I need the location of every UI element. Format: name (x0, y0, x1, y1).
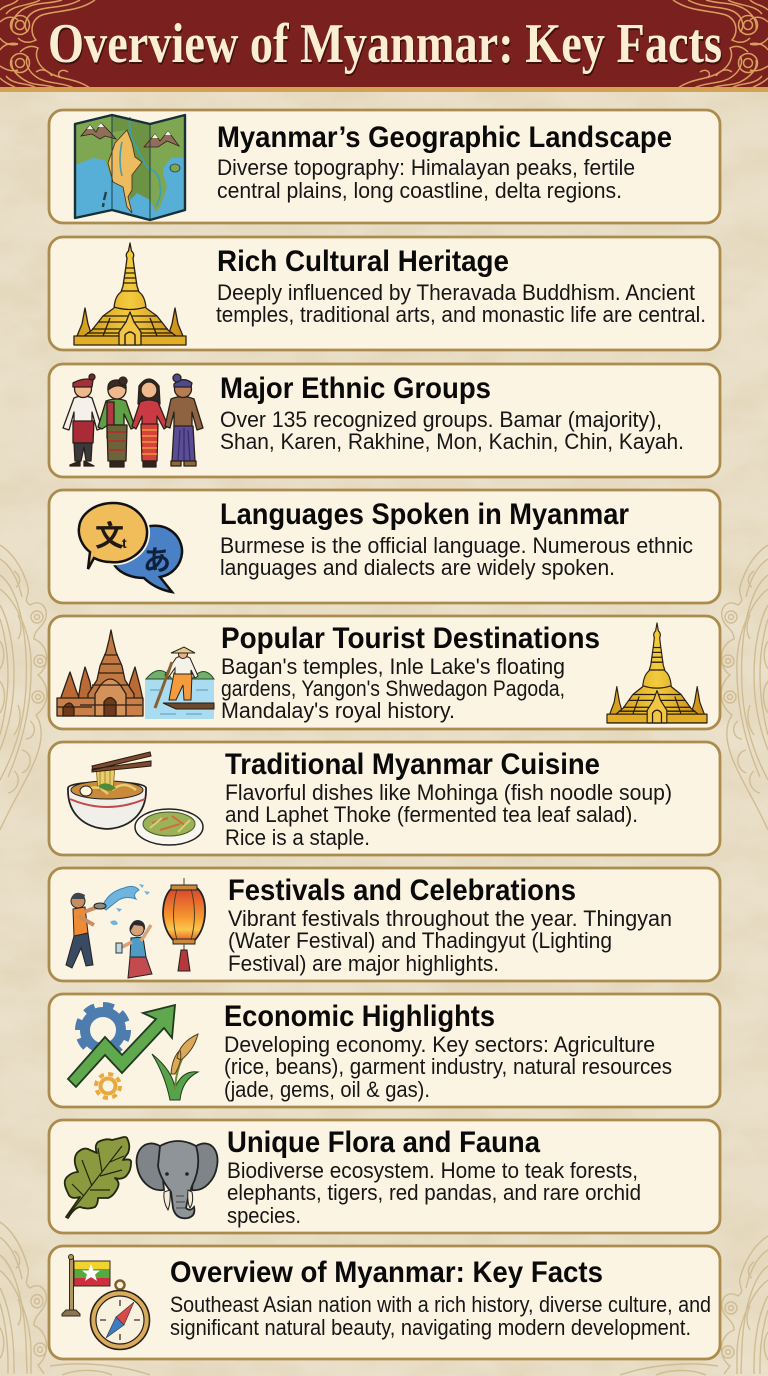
text block: Festival) are major highlights. (228, 951, 499, 976)
header banner (0, 0, 768, 92)
text block (228, 906, 672, 976)
text block: Flavorful dishes like Mohinga (fish noodle soup) (225, 780, 672, 805)
text block (221, 654, 565, 723)
heading: Languages Spoken in Myanmar (220, 498, 629, 531)
text block: Developing economy. Key sectors: Agriculture (224, 1032, 655, 1057)
text block: significant natural beauty, navigating modern development. (170, 1315, 691, 1340)
text block: species. (227, 1203, 301, 1228)
panel: ethnic groups (49, 364, 720, 477)
text block (170, 1292, 711, 1340)
heading: Overview of Myanmar: Key Facts (170, 1256, 603, 1289)
text block (220, 533, 693, 580)
text block: Diverse topography: Himalayan peaks, fertile (217, 155, 635, 180)
icon: golden pagoda (607, 623, 707, 723)
icon: paper lantern (163, 878, 205, 971)
icon: golden pagoda (74, 243, 186, 345)
heading: Traditional Myanmar Cuisine (225, 748, 600, 781)
panel: tourist destinations (49, 616, 720, 729)
background ornament: right side (620, 545, 768, 1375)
icon: compass (90, 1280, 150, 1350)
icon: Inle Lake boatman (145, 647, 214, 719)
text block: Bagan's temples, Inle Lake's floating (221, 654, 565, 679)
text block: Rice is a staple. (225, 825, 370, 850)
icon: speech bubbles: t (122, 535, 127, 551)
text block: and Laphet Thoke (fermented tea leaf salad). (225, 802, 638, 827)
text block (225, 780, 672, 850)
panel: festivals (49, 868, 720, 981)
panel: cuisine (49, 742, 720, 855)
icon: Bagan temple (57, 630, 143, 716)
text block: Burmese is the official language. Numerous ethnic (220, 533, 693, 558)
icon: Myanmar flag (62, 1254, 110, 1316)
text block: gardens, Yangon's Shwedagon Pagoda, (221, 676, 565, 701)
text block (220, 407, 684, 454)
panel: languages (49, 490, 720, 603)
icon: folded map (75, 115, 185, 220)
text block: Over 135 recognized groups. Bamar (majority), (220, 407, 662, 432)
text block: (Water Festival) and Thadingyut (Lighting (228, 928, 612, 953)
heading: Popular Tourist Destinations (221, 622, 600, 655)
text block (217, 155, 635, 203)
heading: Unique Flora and Fauna (227, 1126, 541, 1159)
header corner ornaments (0, 0, 768, 88)
icon: elephant head (137, 1141, 218, 1218)
heading: Rich Cultural Heritage (217, 245, 509, 278)
text block: (jade, gems, oil & gas). (224, 1077, 430, 1102)
icon: four people in traditional dress (63, 374, 203, 467)
text block: languages and dialects are widely spoken. (220, 555, 615, 580)
text block: central plains, long coastline, delta regions. (217, 178, 622, 203)
panel: geographic landscape (49, 110, 720, 223)
text block: Deeply influenced by Theravada Buddhism. Ancient (217, 280, 696, 305)
icon: gears, growth arrow and rice (68, 1005, 198, 1100)
heading: Myanmar’s Geographic Landscape (217, 121, 672, 154)
panel: flora and fauna (49, 1120, 720, 1233)
panel: economy (49, 994, 720, 1107)
text block: temples, traditional arts, and monastic life are central. (216, 302, 706, 327)
text block: (rice, beans), garment industry, natural resources (224, 1054, 672, 1079)
text block: Shan, Karen, Rakhine, Mon, Kachin, Chin, Kayah. (220, 429, 684, 454)
icon: speech bubbles: 文 (95, 513, 124, 555)
icon: noodle bowl and salad (68, 752, 203, 845)
text block: Vibrant festivals throughout the year. Thingyan (228, 906, 672, 931)
icon: speech bubbles: あ (143, 539, 171, 579)
icon: oak leaf (65, 1137, 131, 1218)
background ornament: left side (0, 545, 150, 1375)
text block: elephants, tigers, red pandas, and rare orchid (227, 1180, 641, 1205)
text block (227, 1158, 641, 1228)
icon: water festival people (66, 884, 152, 978)
panel: key facts overview (49, 1246, 720, 1359)
text block (224, 1032, 672, 1102)
heading: Economic Highlights (224, 1000, 495, 1033)
text block: Biodiverse ecosystem. Home to teak forests, (227, 1158, 638, 1183)
text block: Mandalay's royal history. (221, 698, 455, 723)
heading: Festivals and Celebrations (228, 874, 576, 907)
panel: cultural heritage (49, 237, 720, 350)
heading: Major Ethnic Groups (220, 372, 491, 405)
text block (216, 280, 706, 327)
icon: speech bubbles (79, 503, 182, 592)
